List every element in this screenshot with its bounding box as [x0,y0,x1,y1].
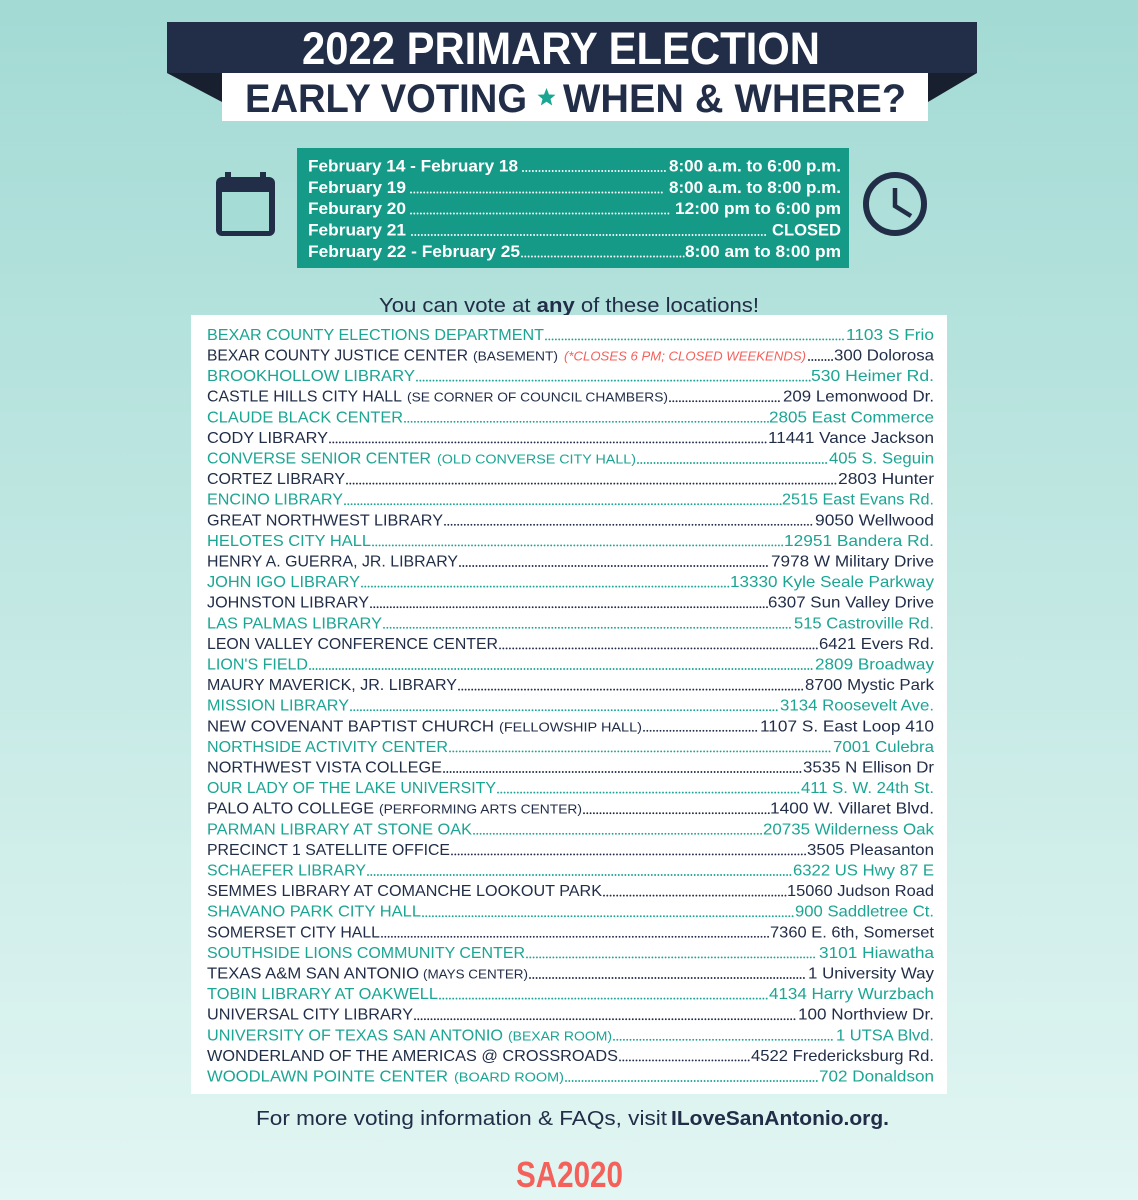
location: New Covenant Baptist Church [207,718,934,735]
location: Leon Valley Conference Center: 6421 Evers Rd. [819,636,934,653]
location: Woodlawn Pointe Center: WOODLAWN POINTE CENTER [207,1068,448,1085]
location: Precinct 1 Satellite Office: PRECINCT 1 SATELLITE OFFICE [207,842,450,859]
intro text: You can vote at any of these locations! [379,295,759,317]
icon: calendar [216,172,275,236]
footer text: ILoveSanAntonio.org. [671,1108,889,1130]
location: Tobin Library at Oakwell: 4134 Harry Wurzbach [769,986,934,1003]
hours row: February 22 - 25: February 22 - February 25 [308,242,520,261]
location: Helotes City Hall [207,533,934,550]
location: Texas A&M San Antonio: 1 University Way [808,965,934,982]
location: Lion's Field: 2809 Broadway [815,656,934,673]
location: Southside Lions Community Center: SOUTHSIDE LIONS COMMUNITY CENTER [207,945,525,962]
hours row: February 21 [308,220,841,240]
panel: locations list [191,315,947,1094]
location: Castle Hills City Hall: (SE CORNER OF COUNCIL CHAMBERS) [407,390,668,405]
location: New Covenant Baptist Church: 1107 S. East Loop 410 [760,718,934,735]
hours row: February 19: February 19 [308,178,406,197]
hours row: February 20 [308,199,841,218]
location: Our Lady of the Lake University: 411 S. W. 24th St. [801,780,934,797]
location: Palo Alto College: PALO ALTO COLLEGE [207,801,374,818]
location: Schaefer Library: SCHAEFER LIBRARY [207,862,366,879]
location: Henry A. Guerra, Jr. Library: HENRY A. GUERRA, JR. LIBRARY [207,553,458,570]
location: New Covenant Baptist Church: (FELLOWSHIP HALL) [499,719,642,734]
location: Northwest Vista College: NORTHWEST VISTA COLLEGE [207,759,442,776]
location: Leon Valley Conference Center: LEON VALLEY CONFERENCE CENTER [207,636,498,653]
location: Henry A. Guerra, Jr. Library: 7978 W Military Drive [771,553,934,570]
location: Lion's Field [207,656,934,674]
location: Maury Maverick, Jr. Library: MAURY MAVERICK, JR. LIBRARY [207,677,457,694]
location: Las Palmas Library: 515 Castroville Rd. [794,615,934,632]
location: John Igo Library: 13330 Kyle Seale Parkway [730,574,934,591]
location: Las Palmas Library: LAS PALMAS LIBRARY [207,615,382,632]
location: Shavano Park City Hall [207,904,934,921]
location: Northside Activity Center [207,739,934,756]
location: Bexar County Justice Center: 300 Dolorosa [834,348,934,365]
location: University of Texas San Antonio [207,1027,934,1044]
location: Cortez Library: CORTEZ LIBRARY [207,471,345,488]
location: University of Texas San Antonio: (BEXAR ROOM) [508,1028,612,1043]
location: Bexar County Justice Center: (*CLOSES 6 PM; CLOSED WEEKENDS) [564,349,806,364]
title banner [167,22,977,121]
location: Wonderland of the Americas: WONDERLAND OF THE AMERICAS @ CROSSROADS [207,1048,618,1065]
location: Bexar County Justice Center: (BASEMENT) [473,349,558,364]
location: Lion's Field: LION'S FIELD [207,656,308,673]
location: Cody Library: 11441 Vance Jackson [768,430,934,447]
hours row: February 14 - 18 [308,156,841,176]
panel: voting hours [297,148,849,268]
location: Bexar County Elections Department: 1103 S Frio [846,327,934,344]
location: Precinct 1 Satellite Office [207,842,934,859]
location: Mission Library [207,698,934,715]
location: Bexar County Elections Department: BEXAR COUNTY ELECTIONS DEPARTMENT [207,327,544,344]
location: Schaefer Library [207,862,934,880]
location: Northwest Vista College [207,760,935,776]
location: Northwest Vista College: 3535 N Ellison Dr [803,759,935,776]
location: Parman Library at Stone Oak: 20735 Wilderness Oak [763,821,935,838]
location: Converse Senior Center [207,450,934,468]
location: Somerset City Hall: 7360 E. 6th, Somerset [770,924,935,941]
location: Palo Alto College [207,801,934,818]
location: Wonderland of the Americas: 4522 Fredericksburg Rd. [751,1048,934,1065]
location: Converse Senior Center: CONVERSE SENIOR CENTER [207,451,431,468]
location: Parman Library at Stone Oak: PARMAN LIBRARY AT STONE OAK [207,821,472,838]
location: Brookhollow Library: 530 Heimer Rd. [811,368,934,385]
location: Our Lady of the Lake University: OUR LADY OF THE LAKE UNIVERSITY [207,780,496,797]
location: Texas A&M San Antonio [207,966,934,982]
location: Somerset City Hall: SOMERSET CITY HALL [207,924,380,941]
icon: star [538,88,556,106]
location: Henry A. Guerra, Jr. Library [207,554,934,570]
location: Johnston Library: 6307 Sun Valley Drive [768,595,934,612]
location: Shavano Park City Hall: SHAVANO PARK CITY HALL [207,904,421,921]
location: Bexar County Elections Department [207,327,934,344]
location: Southside Lions Community Center: 3101 Hiawatha [819,945,934,962]
location: Northside Activity Center: 7001 Culebra [833,739,934,756]
location: Woodlawn Pointe Center: (BOARD ROOM) [454,1069,564,1084]
location: Cortez Library: 2803 Hunter [838,471,935,488]
heading: 2022 primary election: 2022 PRIMARY ELECTION [302,23,820,74]
location: Castle Hills City Hall: 209 Lemonwood Dr. [783,389,934,406]
location: Claude Black Center [207,409,934,426]
location: Universal City Library: 100 Northview Dr. [798,1007,934,1024]
location: Palo Alto College: 1400 W. Villaret Blvd. [770,801,934,818]
location: Shavano Park City Hall: 900 Saddletree Ct. [795,904,934,921]
location: Parman Library at Stone Oak [207,821,935,838]
hours row: February 14 - 18: February 14 - February 18 [308,156,518,176]
location: Somerset City Hall [207,924,935,941]
location: Woodlawn Pointe Center: 702 Donaldson [819,1068,934,1085]
location: Bexar County Justice Center: BEXAR COUNTY JUSTICE CENTER [207,348,468,365]
location: Palo Alto College: (PERFORMING ARTS CENTER) [379,802,582,817]
location: Bexar County Justice Center [207,348,934,364]
footer text: For more voting information & FAQs, visit [256,1108,667,1130]
location: Maury Maverick, Jr. Library: 8700 Mystic Park [805,677,935,694]
location: Universal City Library [207,1007,934,1024]
hours row: February 22 - 25: 8:00 am to 8:00 pm [685,242,841,261]
location: Encino Library [207,492,934,509]
location: Mission Library: MISSION LIBRARY [207,698,349,715]
location: Universal City Library: UNIVERSAL CITY LIBRARY [207,1007,413,1024]
location: Woodlawn Pointe Center [207,1068,934,1086]
icon: clock [866,175,924,233]
location: Claude Black Center: 2805 East Commerce [769,409,934,426]
hours row: February 21: CLOSED [772,220,841,240]
location: Brookhollow Library: BROOKHOLLOW LIBRARY [207,368,415,385]
location: Helotes City Hall: HELOTES CITY HALL [207,533,371,550]
location: Brookhollow Library [207,368,934,385]
location: University of Texas San Antonio: UNIVERSITY OF TEXAS SAN ANTONIO [207,1027,503,1044]
location: Semmes Library at Comanche Lookout Park [207,883,934,900]
hours row: February 14 - 18: 8:00 a.m. to 6:00 p.m. [669,156,841,176]
location: Castle Hills City Hall: CASTLE HILLS CITY HALL [207,389,402,406]
location: Great Northwest Library: 9050 Wellwood [815,512,934,529]
location: Tobin Library at Oakwell [207,986,934,1003]
location: Johnston Library [207,595,934,612]
location: Our Lady of the Lake University [207,780,934,797]
heading: early voting: EARLY VOTING [245,77,527,121]
location: New Covenant Baptist Church: NEW COVENANT BAPTIST CHURCH [207,718,494,735]
location: Southside Lions Community Center [207,945,934,962]
location: Tobin Library at Oakwell: TOBIN LIBRARY AT OAKWELL [207,986,438,1003]
location: Precinct 1 Satellite Office: 3505 Pleasanton [807,842,934,859]
location: Converse Senior Center: 405 S. Seguin [829,451,934,468]
logo: SA2020: SA2020 [516,1154,623,1195]
location: Claude Black Center: CLAUDE BLACK CENTER [207,409,403,426]
hours row: February 20: Feburary 20 [308,199,406,218]
location: Mission Library: 3134 Roosevelt Ave. [780,698,934,715]
location: Schaefer Library: 6322 US Hwy 87 E [793,862,934,879]
location: Johnston Library: JOHNSTON LIBRARY [207,595,369,612]
location: Great Northwest Library: GREAT NORTHWEST LIBRARY [207,512,443,529]
location: Encino Library: ENCINO LIBRARY [207,492,343,509]
location: Cody Library: CODY LIBRARY [207,430,328,447]
hours row: February 19 [308,178,841,197]
hours row: February 21: February 21 [308,220,406,240]
location: John Igo Library [207,574,934,591]
location: Northside Activity Center: NORTHSIDE ACTIVITY CENTER [207,739,448,756]
hours row: February 19: 8:00 a.m. to 8:00 p.m. [669,178,841,197]
location: Converse Senior Center: (OLD CONVERSE CITY HALL) [437,452,636,467]
location: Helotes City Hall: 12951 Bandera Rd. [784,533,934,550]
location: Cortez Library [207,471,935,488]
hours row: February 22 - 25 [308,242,841,261]
location: University of Texas San Antonio: 1 UTSA Blvd. [836,1027,934,1044]
hours row: February 20: 12:00 pm to 6:00 pm [675,199,841,218]
location: Texas A&M San Antonio: (MAYS CENTER) [423,966,528,981]
location: John Igo Library: JOHN IGO LIBRARY [207,574,360,591]
location: Semmes Library at Comanche Lookout Park: 15060 Judson Road [787,883,934,900]
location: Maury Maverick, Jr. Library [207,677,935,694]
footer text [256,1108,889,1130]
location: Leon Valley Conference Center [207,636,934,653]
heading: when and where: WHEN & WHERE? [563,77,906,121]
location: Cody Library [207,430,934,447]
location: Semmes Library at Comanche Lookout Park: SEMMES LIBRARY AT COMANCHE LOOKOUT PARK [207,883,602,900]
location: Wonderland of the Americas [207,1048,934,1065]
location: Great Northwest Library [207,512,934,529]
location: Texas A&M San Antonio: TEXAS A&M SAN ANTONIO [207,965,419,982]
location: Las Palmas Library [207,615,934,632]
location: Encino Library: 2515 East Evans Rd. [782,492,934,509]
location: Castle Hills City Hall [207,389,934,406]
